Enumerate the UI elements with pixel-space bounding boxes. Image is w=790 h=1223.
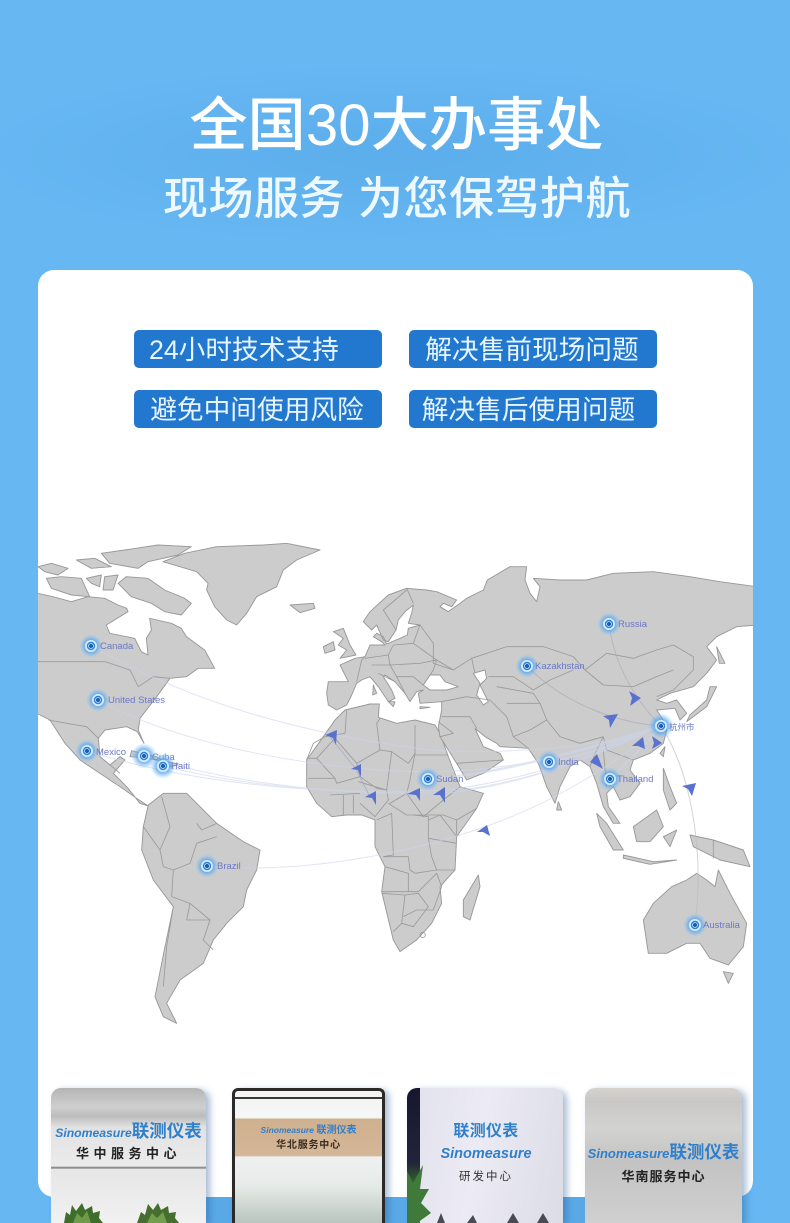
- marker: Canada: Canada: [100, 641, 134, 652]
- marker: India: India: [558, 757, 579, 768]
- brand name: 联测仪表: [453, 1123, 519, 1140]
- feature tag: pre-sale problems: 解决售前现场问题: [425, 335, 639, 365]
- photo: research and development center: [407, 1088, 563, 1223]
- marker: Canada: [79, 634, 134, 658]
- marker: Thailand: [598, 767, 653, 791]
- marker: Cuba: [131, 743, 175, 769]
- marker: India: [537, 750, 579, 774]
- marker: Haiti: Haiti: [171, 761, 190, 772]
- route arrowheads: [325, 691, 696, 836]
- marker: Hangzhou: 杭州市: [669, 722, 695, 732]
- marker: Russia: Russia: [618, 619, 648, 630]
- sign text: Sinomeasure联测仪表: [55, 1121, 202, 1141]
- marker: Brazil: Brazil: [217, 861, 241, 872]
- marker: Brazil: [195, 854, 241, 878]
- frame inner bar: [235, 1097, 382, 1099]
- land: Americas and Atlantic islands: [30, 543, 320, 1023]
- feature tag: avoid risk: 避免中间使用风险: [150, 395, 364, 425]
- photo: central China service center: [51, 1088, 206, 1223]
- dark left strip: [407, 1088, 420, 1223]
- marker: Sudan: [416, 767, 463, 791]
- plant leaves: [407, 1165, 549, 1223]
- marker: Australia: [683, 913, 741, 937]
- feature tag: pre-sale problems: [409, 330, 657, 368]
- marker: Haiti: [150, 753, 190, 779]
- brand latin: Sinomeasure: [440, 1146, 532, 1162]
- feature tag: after-sale problems: [409, 390, 657, 428]
- potted plants: [64, 1203, 179, 1223]
- marker: Cuba: Cuba: [152, 752, 175, 763]
- marker: United States: [86, 688, 165, 712]
- panel: white card: [38, 270, 753, 1197]
- bottom strip behind photos: [51, 1197, 742, 1223]
- marker: United States: United States: [108, 695, 165, 706]
- land: Africa: [307, 704, 483, 952]
- sign text: Sinomeasure联测仪表: [588, 1142, 739, 1162]
- subtitle: 现场服务 为您保驾护航: [163, 173, 631, 224]
- marker: Kazakhstan: Kazakhstan: [535, 661, 585, 672]
- marker: Mexico: [75, 739, 126, 763]
- marker: Sudan: Sudan: [436, 774, 463, 785]
- feature tag: avoid risk: [134, 390, 382, 428]
- sign text: Sinomeasure 联测仪表: [261, 1125, 356, 1136]
- photo: south China service center: [585, 1088, 742, 1223]
- flight routes: [87, 624, 698, 925]
- feature tag: after-sale problems: 解决售后使用问题: [422, 395, 635, 425]
- sign subtitle: 华中服务中心: [76, 1146, 181, 1161]
- feature tag: 24 hour support: 24小时技术支持: [149, 335, 339, 365]
- land: Eurasia and Oceania: [323, 567, 757, 983]
- sign subtitle: 研发中心: [459, 1171, 513, 1183]
- sign subtitle: 华南服务中心: [621, 1169, 706, 1184]
- world map with service routes: [38, 542, 753, 1024]
- title: 全国30大办事处: [189, 93, 604, 158]
- marker: Kazakhstan: [515, 654, 585, 678]
- background shade behind header: [0, 70, 790, 240]
- marker: Mexico: Mexico: [96, 747, 126, 758]
- photo: north China service center: [232, 1088, 385, 1223]
- marker: Thailand: Thailand: [617, 774, 653, 785]
- marker: Russia: [597, 612, 648, 636]
- sign subtitle: 华北服务中心: [276, 1140, 341, 1151]
- marker: Hangzhou: [648, 713, 695, 739]
- marker: Australia: Australia: [703, 920, 741, 931]
- feature tag: 24 hour support: [134, 330, 382, 368]
